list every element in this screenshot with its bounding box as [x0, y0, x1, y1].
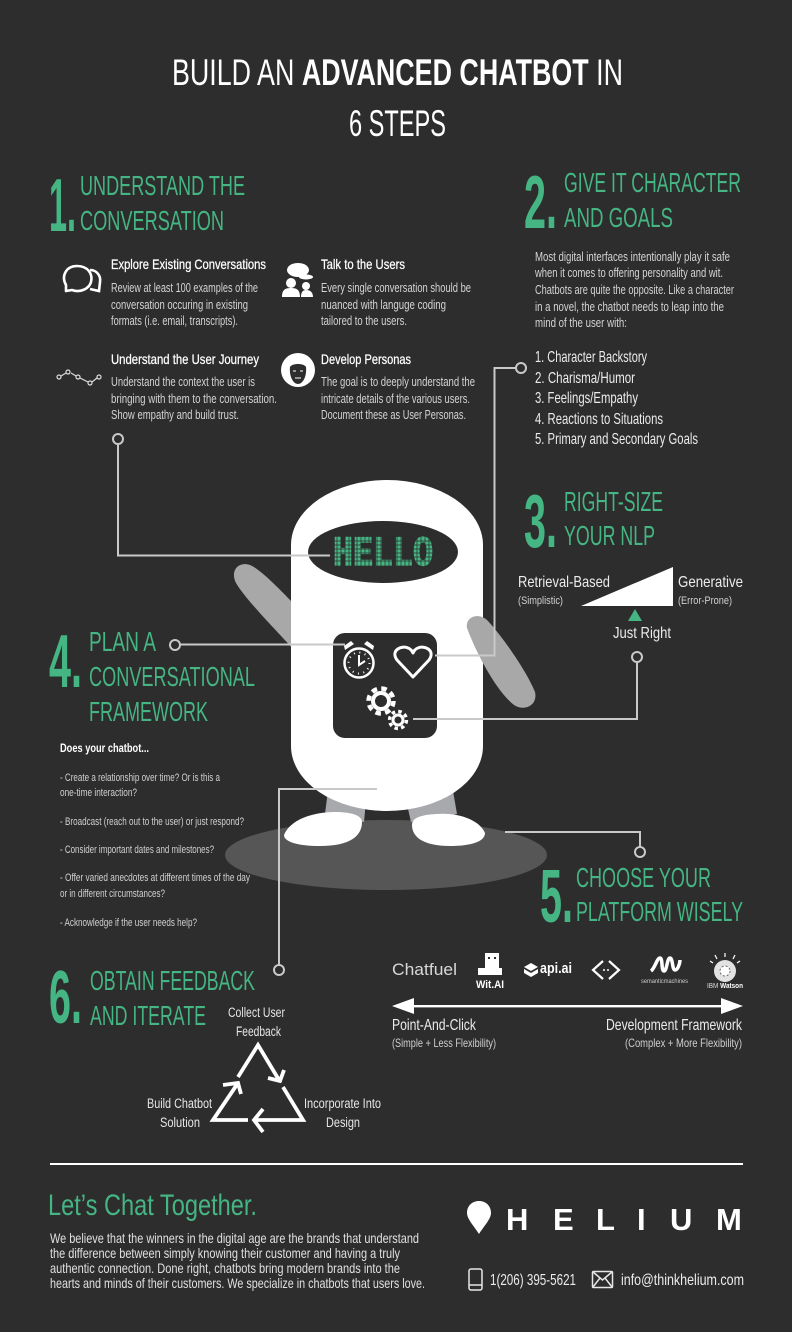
- step 6 heading: OBTAIN FEEDBACK: [90, 965, 255, 996]
- step 3 heading: YOUR NLP: [564, 520, 655, 551]
- Helium wordmark: HELIUM: [506, 1202, 742, 1237]
- logo: Chatfuel: Chatfuel: [392, 960, 457, 979]
- step 2 paragraph: mind of the user with:: [535, 316, 627, 330]
- connector lines: [113, 363, 645, 975]
- block: personas: Document these as User Personas.: [321, 408, 466, 422]
- robot: [234, 480, 535, 846]
- arrow labels: (Complex + More Flexibility): [625, 1036, 742, 1050]
- step 5 panel: [392, 854, 743, 1050]
- right arm: [467, 616, 535, 708]
- step 2 paragraph: when it comes to offering personality and wit.: [534, 266, 723, 280]
- step 2 list: 3. Feelings/Empathy: [535, 390, 638, 407]
- step 4 questions: [60, 741, 250, 929]
- step 2 list: 5. Primary and Secondary Goals: [535, 431, 698, 448]
- step 4 heading: 4.: [49, 619, 82, 703]
- block: talk to users: [321, 256, 471, 328]
- block: personas: Develop Personas: [321, 351, 411, 367]
- step 5 heading: CHOOSE YOUR: [576, 862, 711, 893]
- block: personas: The goal is to deeply understand the: [321, 375, 475, 389]
- block: talk to users: tailored to the users.: [321, 314, 407, 328]
- logo: Wit.AI: Wit.AI: [476, 979, 504, 991]
- arrow labels: [392, 1017, 743, 1050]
- just right label: Just Right: [613, 625, 671, 642]
- step 4 heading: FRAMEWORK: [89, 696, 208, 727]
- step 3 heading: RIGHT-SIZE: [564, 486, 663, 517]
- logo: code brackets: [593, 961, 619, 979]
- footer paragraph: authentic connection. Done right, chatbots bring modern brands into the: [50, 1260, 400, 1276]
- block: user journey: [111, 351, 277, 422]
- step 4 heading: PLAN A: [89, 626, 156, 657]
- arrow labels: Development Framework: [606, 1017, 743, 1034]
- step 2 paragraph: [534, 250, 734, 330]
- chest panel: [333, 633, 437, 738]
- cycle labels: Feedback: [236, 1024, 281, 1039]
- block: explore conversations: Explore Existing Conversations: [111, 256, 266, 272]
- logo: semantic machines: semanticmachines: [641, 978, 689, 985]
- block: explore conversations: conversation occuring in existing: [111, 298, 248, 312]
- step 6 heading: 6.: [49, 955, 82, 1039]
- step 5 heading: [540, 854, 743, 938]
- step 4 questions: - Acknowledge if the user needs help?: [60, 917, 197, 929]
- step 2 heading: AND GOALS: [564, 202, 673, 233]
- step 2 list: 4. Reactions to Situations: [535, 411, 663, 428]
- step 2 paragraph: Most digital interfaces intentionally play it safe: [535, 250, 730, 264]
- logo: IBM Watson: [707, 953, 743, 990]
- block: user journey: Show empathy and build trust.: [111, 408, 239, 422]
- icon: gears: [368, 688, 406, 728]
- left arm: [234, 564, 300, 650]
- step 2 paragraph: in a novel, the chatbot needs to leap into the: [535, 300, 724, 314]
- title: 6 STEPS: [349, 103, 446, 144]
- step 4 questions: - Offer varied anecdotes at different times of the day: [60, 872, 250, 884]
- step 4 questions: one-time interaction?: [60, 787, 137, 799]
- step 4 questions: or in different circumstances?: [60, 888, 165, 900]
- step 4 questions: - Create a relationship over time? Or is this a: [60, 772, 221, 784]
- cycle labels: Collect User: [228, 1005, 285, 1020]
- logo: IBM Watson: IBM Watson: [707, 981, 743, 990]
- step 1 heading: 1.: [49, 163, 76, 247]
- body: [291, 480, 483, 811]
- footer paragraph: We believe that the winners in the digital age are the brands that understand: [50, 1230, 419, 1246]
- icon: heart: [395, 647, 431, 677]
- legs: [325, 785, 457, 822]
- step 4 questions: - Consider important dates and milestones?: [60, 844, 214, 856]
- icon: mail: [592, 1272, 612, 1288]
- logo: api.ai: api.ai: [540, 960, 572, 977]
- step 2 list: 1. Character Backstory: [535, 349, 647, 366]
- connector: step 5: [505, 832, 645, 857]
- shadow under robot: [225, 820, 547, 890]
- step 3 panel: [518, 479, 743, 642]
- block: explore conversations: [111, 256, 266, 328]
- NLP scale labels: (Simplistic): [518, 595, 563, 607]
- connector: step 3: [413, 652, 642, 719]
- step 4 heading: [49, 619, 255, 727]
- connector: step 6: [274, 789, 377, 975]
- step 1 heading: [49, 163, 245, 247]
- step 2 heading: [524, 160, 741, 244]
- just right marker: [628, 609, 642, 621]
- step 4 questions: Does your chatbot...: [60, 741, 149, 755]
- icon: Helium pin: [467, 1201, 491, 1234]
- step 3 heading: 3.: [524, 479, 557, 563]
- step 2 list: 2. Charisma/Humor: [535, 370, 635, 387]
- icon: journey path: [57, 370, 101, 385]
- footer paragraph: the difference between simply knowing their customer and having a truly: [50, 1245, 400, 1261]
- connector: step 1: [113, 434, 330, 556]
- footer paragraph: [50, 1230, 425, 1291]
- step 4 questions: - Broadcast (reach out to the user) or just respond?: [60, 816, 244, 828]
- step 6 panel: [49, 955, 381, 1132]
- block: talk to users: nuanced with languge coding: [321, 298, 446, 312]
- block: explore conversations: formats (i.e. email, transcripts).: [111, 314, 238, 328]
- display text: HELLO: HELLO: [333, 530, 433, 578]
- cycle labels: Incorporate Into: [304, 1096, 381, 1111]
- step 1 heading: UNDERSTAND THE: [80, 170, 245, 201]
- double-headed arrow: [392, 998, 743, 1014]
- icon: phone: [469, 1269, 482, 1290]
- NLP scale labels: (Error-Prone): [678, 595, 732, 607]
- step 6 heading: [49, 955, 255, 1039]
- step 2 list: [535, 349, 698, 448]
- icon: persona: [281, 353, 315, 387]
- step 2 heading: 2.: [524, 160, 557, 244]
- visor: [308, 521, 458, 583]
- title: [172, 52, 623, 144]
- block: talk to users: Talk to the Users: [321, 256, 405, 272]
- step 3 heading: [524, 479, 663, 563]
- email address: info@thinkhelium.com: [621, 1272, 744, 1289]
- block: user journey: Understand the User Journey: [111, 351, 259, 367]
- NLP scale labels: [518, 574, 743, 607]
- block: personas: intricate details of the various users.: [321, 392, 470, 406]
- connector: step 4: [170, 640, 345, 650]
- cycle labels: [147, 1005, 381, 1130]
- block: talk to users: Every single conversation should be: [321, 281, 471, 295]
- logo: api.ai: [524, 960, 572, 977]
- cycle labels: Solution: [160, 1115, 200, 1130]
- footer heading: Let’s Chat Together.: [48, 1189, 257, 1222]
- footer paragraph: hearts and minds of their customers. We specialize in chatbots that users love.: [50, 1275, 425, 1291]
- feedback cycle arrows: [213, 1045, 303, 1132]
- block: user journey: Understand the context the user is: [111, 375, 255, 389]
- arrow labels: (Simple + Less Flexibility): [392, 1036, 496, 1050]
- cycle labels: Build Chatbot: [147, 1096, 212, 1111]
- step 4 heading: CONVERSATIONAL: [89, 661, 255, 692]
- feet: [284, 812, 485, 846]
- step 4 panel: [49, 619, 255, 929]
- footer panel: [48, 1189, 744, 1291]
- step 1 heading: CONVERSATION: [80, 205, 224, 236]
- connector: step 2: [435, 363, 526, 656]
- title: BUILD AN ADVANCED CHATBOT IN: [172, 52, 623, 93]
- cycle labels: Design: [326, 1115, 360, 1130]
- block: personas: [321, 351, 475, 422]
- step 6 heading: AND ITERATE: [90, 1000, 206, 1031]
- logo: Wit.AI: [476, 953, 504, 991]
- icon: clock: [344, 641, 374, 678]
- block: user journey: bringing with them to the conversation.: [111, 392, 277, 406]
- block: explore conversations: Review at least 100 examples of the: [111, 281, 258, 295]
- NLP scale labels: Generative: [678, 574, 743, 591]
- NLP wedge: [581, 567, 673, 606]
- logo: semantic machines: [641, 958, 689, 985]
- arrow labels: Point-And-Click: [392, 1017, 477, 1034]
- step 2 panel: [524, 160, 741, 448]
- phone number: 1(206) 395-5621: [490, 1272, 576, 1289]
- icon: talking users: [282, 263, 313, 297]
- NLP scale labels: Retrieval-Based: [518, 574, 610, 591]
- icon: speech bubbles: [64, 266, 100, 291]
- step 1 panel: [49, 163, 475, 422]
- step 5 heading: 5.: [540, 854, 573, 938]
